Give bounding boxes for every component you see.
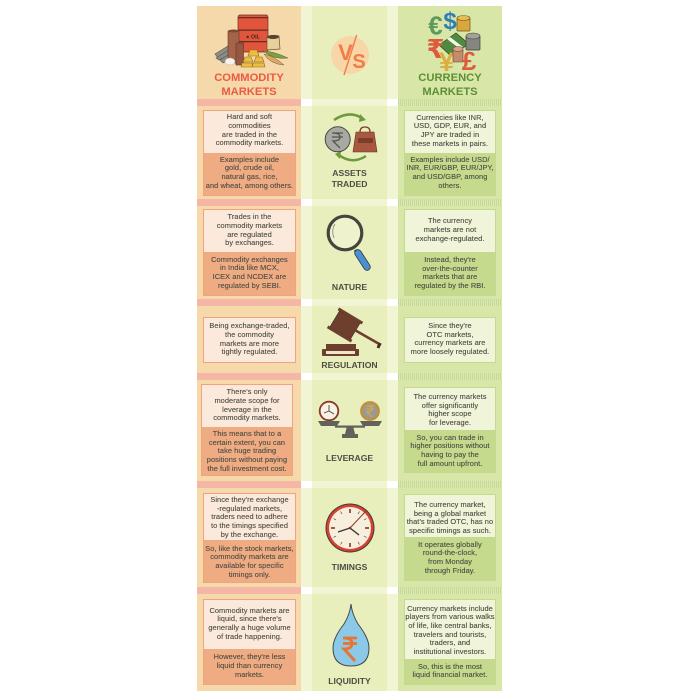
label: assets traded: TRADED — [332, 178, 367, 188]
panel: leverage, currency: for leverage. — [429, 418, 471, 427]
panel: leverage, currency — [404, 387, 496, 473]
icon: VS badge: V — [338, 40, 353, 65]
panel: liquidity, currency: players from various walks — [405, 612, 495, 621]
panel: timings, currency: that's traded OTC, has no — [407, 517, 493, 526]
panel: assets traded, currency: USD, GDP, EUR, and — [414, 121, 486, 130]
panel: nature, commodity: by exchanges. — [225, 238, 274, 247]
icon: wall clock — [326, 504, 374, 552]
panel: leverage, currency: higher scope — [428, 409, 472, 418]
panel: nature, commodity: regulated by SEBI. — [218, 281, 281, 290]
panel: leverage, commodity: moderate scope for — [214, 396, 280, 405]
panel: nature, commodity: Commodity exchanges — [211, 255, 288, 264]
panel: commodity column background — [197, 6, 301, 691]
heading: commodity markets: COMMODITY — [214, 72, 284, 84]
panel: regulation, commodity: markets are more — [220, 339, 279, 348]
panel: assets traded, commodity: Examples include — [220, 155, 279, 164]
label: leverage: LEVERAGE — [326, 452, 373, 462]
panel: liquidity, currency: institutional investors. — [414, 647, 486, 656]
panel: nature, currency: markets are not — [424, 225, 476, 234]
panel: regulation, currency: Since they're — [428, 321, 472, 330]
panel: timings, commodity: by the exchange. — [221, 530, 278, 539]
panel: leverage, commodity — [201, 384, 293, 476]
panel: liquidity, currency: liquid financial market. — [412, 670, 488, 679]
panel: regulation, commodity: tightly regulated. — [222, 347, 277, 356]
panel: regulation, commodity — [203, 317, 296, 363]
icon: water drop with rupee — [333, 604, 369, 666]
panel: assets traded, commodity: commodities — [228, 121, 271, 130]
panel: liquidity, currency: travelers and tourists, — [414, 630, 486, 639]
icon: gavel — [322, 308, 381, 356]
panel: nature, currency: exchange-regulated. — [416, 234, 484, 243]
panel: leverage, currency: So, you can trade in — [416, 433, 484, 442]
panel: leverage, commodity: There's only — [226, 387, 267, 396]
panel: timings, currency: specific timings as such. — [409, 526, 491, 535]
icon: commodities pile: ● OIL — [246, 34, 261, 40]
panel: liquidity, commodity: generally a huge volume — [208, 623, 291, 632]
panel: nature, commodity: are regulated — [227, 230, 272, 239]
panel: timings, currency: round-the-clock, — [423, 548, 477, 557]
panel: timings, commodity — [203, 493, 296, 583]
panel: assets traded, currency: others. — [438, 181, 462, 190]
panel: liquidity, commodity — [203, 599, 296, 685]
label: timings: TIMINGS — [332, 562, 367, 572]
icon: commodities pile — [215, 15, 288, 67]
icon: VS badge — [331, 35, 369, 75]
panel: leverage, currency: having to pay the — [421, 450, 479, 459]
icon: currencies pile: ¥ — [439, 47, 454, 77]
panel: regulation, commodity: Being exchange-traded, — [209, 321, 290, 330]
panel: centre column background — [301, 6, 398, 691]
heading: currency markets: CURRENCY — [418, 72, 482, 84]
label: assets traded: ASSETS — [332, 168, 367, 178]
panel: timings, currency: from Monday — [428, 557, 472, 566]
panel: liquidity, currency — [404, 599, 496, 685]
panel: timings, commodity: -regulated markets, — [217, 504, 282, 513]
panel: timings, commodity: traders need to adhere — [211, 512, 288, 521]
panel: nature, commodity: in India like MCX, — [220, 263, 279, 272]
panel: assets traded, currency: these markets in pairs. — [412, 139, 488, 148]
panel: assets traded, commodity: natural gas, rice, — [221, 172, 278, 181]
panel: nature, currency — [404, 209, 496, 296]
panel: nature, currency: Instead, they're — [424, 255, 476, 264]
panel: assets traded, commodity: are traded in the — [222, 130, 277, 139]
label: regulation: REGULATION — [321, 360, 378, 370]
panel: liquidity, currency: So, this is the most — [418, 662, 482, 671]
panel: assets traded, commodity: gold, crude oil, — [225, 163, 274, 172]
panel: leverage, currency: full amount upfront. — [418, 459, 482, 468]
label: nature: NATURE — [332, 282, 367, 292]
panel: leverage, currency: offer significantly — [422, 401, 478, 410]
panel: liquidity, currency: traders, and — [430, 638, 470, 647]
panel: timings, currency: It operates globally — [418, 540, 482, 549]
icon: currencies pile: € — [428, 10, 443, 40]
heading: currency markets — [418, 72, 482, 98]
panel: leverage, commodity: commodity markets. — [213, 413, 281, 422]
panel: liquidity, commodity: liquid, since there's — [217, 614, 282, 623]
panel: assets traded, commodity — [203, 110, 296, 196]
panel: nature, commodity: commodity markets — [217, 221, 282, 230]
panel: nature, currency: markets that are — [423, 272, 477, 281]
heading: commodity markets — [214, 72, 284, 98]
panel: timings, currency — [404, 494, 496, 581]
panel: leverage, commodity: the full investment cost. — [207, 464, 287, 473]
panel: assets traded, currency: Examples include USD/ — [410, 155, 490, 164]
panel: leverage, commodity: This means that to a — [213, 429, 281, 438]
panel: assets traded, currency: Currencies like INR, — [416, 113, 484, 122]
panel: timings, currency: through Friday. — [425, 566, 475, 575]
panel: liquidity, commodity: of trade happening. — [217, 632, 282, 641]
panel: liquidity, currency: of life, like central banks, — [408, 621, 492, 630]
panel: timings, commodity: commodity markets are — [210, 552, 289, 561]
panel: assets traded, currency — [404, 110, 496, 196]
heading: commodity markets: MARKETS — [221, 86, 277, 98]
panel: assets traded, commodity: commodity markets. — [216, 138, 283, 147]
panel: nature, currency: over-the-counter — [422, 264, 478, 273]
label: liquidity: LIQUIDITY — [328, 676, 371, 686]
panel: timings, commodity: available for specific — [215, 561, 284, 570]
panel: regulation, commodity: the commodity — [225, 330, 274, 339]
panel: liquidity, currency: Currency markets include — [407, 604, 493, 613]
panel: liquidity, commodity: liquid than currency — [217, 661, 282, 670]
panel: centre column inner strip — [312, 6, 387, 691]
panel: timings, commodity: timings only. — [229, 570, 270, 579]
panel: liquidity, commodity: markets. — [235, 670, 264, 679]
panel: assets traded, currency: JPY are traded in — [421, 130, 479, 139]
panel: regulation, currency — [404, 317, 496, 363]
heading: currency markets: MARKETS — [422, 86, 478, 98]
panel: liquidity, commodity: Commodity markets are — [209, 606, 290, 615]
icon: currencies pile: £ — [462, 46, 477, 76]
panel: timings, currency: The currency market, — [414, 500, 486, 509]
panel: nature, currency: regulated by the RBI. — [414, 281, 486, 290]
panel: leverage, commodity: certain extent, you can — [209, 438, 285, 447]
icon: VS badge: S — [352, 51, 366, 73]
icon: rupee coin and bag with exchange arrows — [325, 114, 377, 160]
panel: nature, commodity — [203, 209, 296, 296]
icon: currencies pile — [426, 8, 480, 77]
panel: leverage, commodity: take huge trading — [218, 446, 276, 455]
panel: leverage, commodity: positions without paying — [207, 455, 287, 464]
panel: nature, currency: The currency — [428, 216, 472, 225]
panel: timings, commodity: So, like the stock markets, — [205, 544, 294, 553]
panel: assets traded, commodity: and wheat, among others. — [206, 181, 293, 190]
panel: leverage, commodity: leverage in the — [222, 405, 272, 414]
panel: assets traded, commodity: Hard and soft — [227, 112, 272, 121]
icon: balance scale with clock and rupee coin — [318, 402, 382, 438]
panel: regulation, currency: currency markets are — [414, 338, 486, 347]
icon: currencies pile: $ — [443, 8, 457, 35]
label: assets traded — [332, 168, 368, 188]
panel: liquidity, commodity: However, they're less — [214, 652, 285, 661]
panel: regulation, currency: more loosely regulated. — [411, 347, 489, 356]
panel: assets traded, currency: INR, EUR/GBP, EUR/JPY, — [406, 163, 494, 172]
panel: timings, commodity: Since they're exchange — [210, 495, 289, 504]
panel: timings, currency: being a global market — [414, 509, 486, 518]
icon: magnifying glass — [328, 216, 367, 267]
icon: currencies pile: ₹ — [426, 34, 445, 64]
panel: currency column background — [398, 6, 502, 691]
panel: leverage, currency: The currency markets — [413, 392, 487, 401]
panel: regulation, currency: OTC markets, — [427, 330, 473, 339]
panel: nature, commodity: Trades in the — [228, 212, 271, 221]
panel: nature, commodity: ICEX and NCDEX are — [213, 272, 286, 281]
panel: timings, commodity: to the timings specified — [211, 521, 288, 530]
panel: leverage, currency: higher positions without — [410, 441, 490, 450]
panel: assets traded, currency: and USD/GBP, among — [413, 172, 487, 181]
